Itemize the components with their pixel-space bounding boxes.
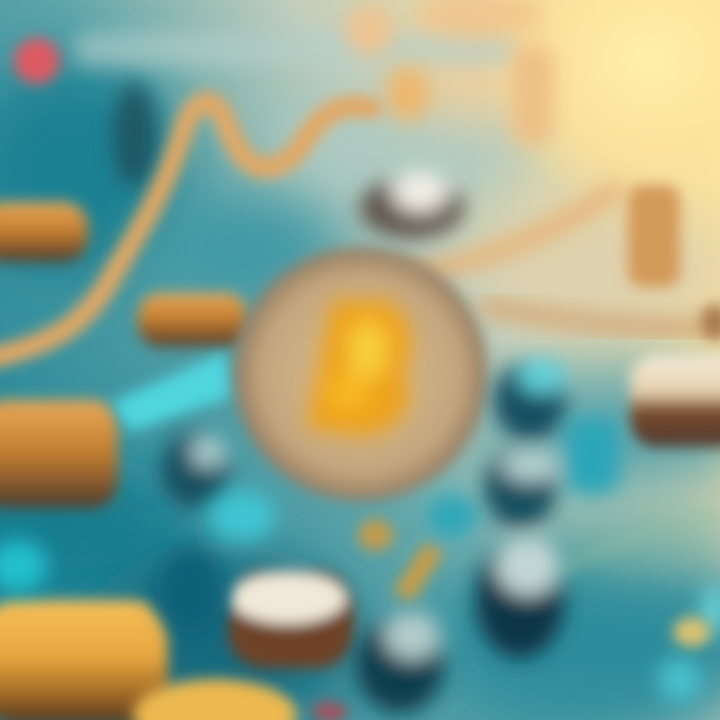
faint diagonal streak: [560, 515, 720, 570]
glow: sun in upper right: [480, 0, 720, 210]
central coin: [234, 247, 488, 501]
coconut: right: [630, 355, 720, 447]
coin stack: upper right: [628, 185, 680, 287]
dark accent near chart: [113, 83, 157, 187]
icon: red dot: [14, 38, 60, 84]
gold block: left: [0, 400, 118, 508]
coin symbol: golden B: [306, 300, 412, 436]
gold bar: left upper: [0, 202, 88, 262]
chart: lower right line: [480, 305, 720, 328]
peach column top: [512, 45, 554, 145]
gold block: lower left: [0, 600, 168, 720]
peach wash top centre: [415, 0, 545, 37]
chart: rising orange line: [0, 4, 430, 358]
coconut: lower centre: [228, 570, 354, 668]
gold block: bottom: [133, 679, 297, 720]
cyan bar: [112, 352, 232, 432]
top banner blur: [75, 32, 515, 66]
small pieces: scattered teal and dark tokens: [0, 358, 720, 713]
gold bar: centre left: [138, 293, 248, 347]
bowl: top centre: [360, 172, 464, 238]
chart: right orange line: [420, 190, 615, 272]
small gold pieces: [312, 304, 720, 720]
